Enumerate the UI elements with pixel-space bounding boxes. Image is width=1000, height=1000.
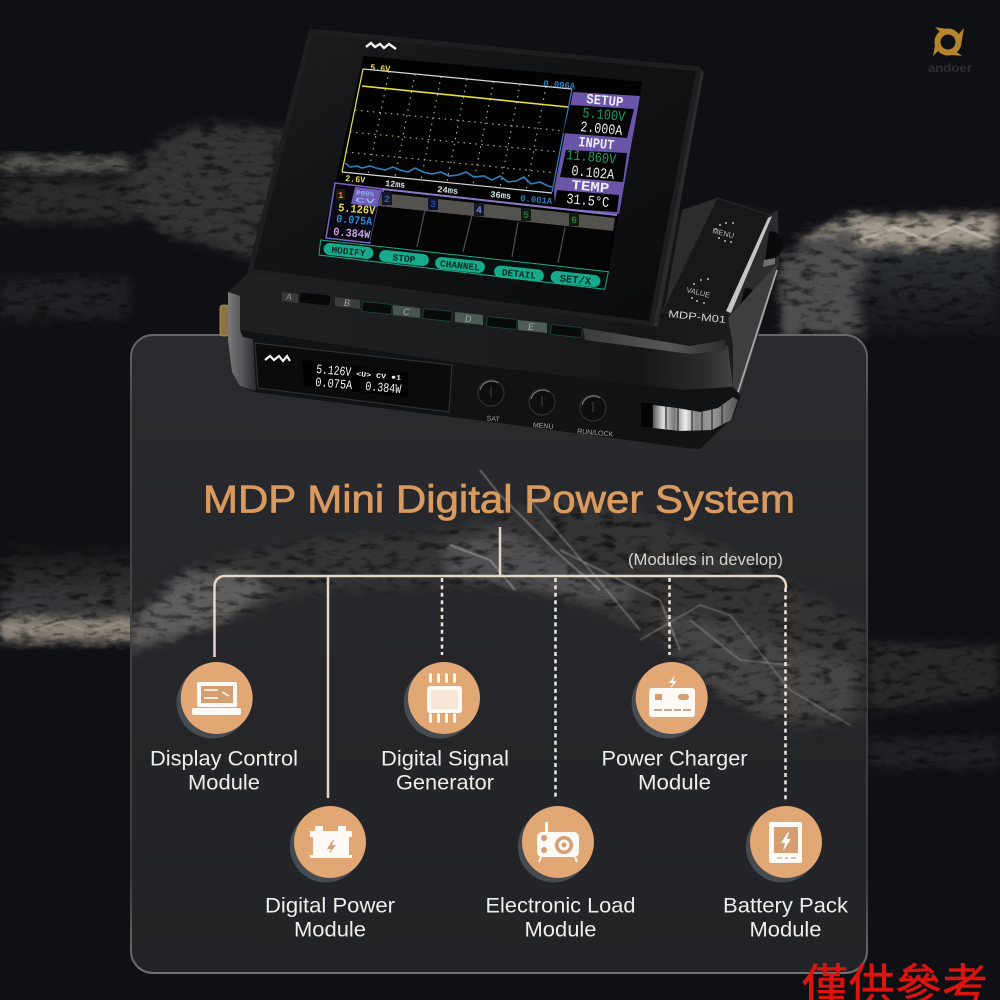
- icon: battery: [310, 826, 352, 858]
- tablet display: [250, 31, 704, 326]
- channel grid 2 to 6: 6: [571, 216, 577, 227]
- icon: chip: [427, 678, 462, 718]
- brand logo: andoer: andoer: [928, 61, 972, 75]
- rock band: lower left: [0, 550, 150, 642]
- rock band: lower right: [868, 642, 1000, 768]
- label: [486, 894, 636, 942]
- button: SAT: SAT: [486, 415, 501, 424]
- readout panel: setup, input, temp: 11.860V: [566, 148, 617, 169]
- button: SAT: [478, 380, 504, 424]
- oscilloscope plot: 36ms: [490, 190, 512, 202]
- right dial block: [662, 198, 782, 332]
- channel 1 block: [326, 183, 384, 243]
- button row A to E: E: [528, 322, 535, 332]
- label: [265, 894, 395, 942]
- channel 1 block: CV: [355, 197, 377, 207]
- oscilloscope plot: 24ms: [437, 185, 459, 197]
- label: Electronic Load: [486, 894, 636, 918]
- module: Display Control: [150, 662, 298, 794]
- panel rock texture: [131, 470, 868, 732]
- channel grid 2 to 6: 4: [476, 206, 482, 217]
- button row A to E: D: [465, 314, 472, 324]
- label: Display Control: [150, 748, 298, 770]
- oscilloscope plot: 5.6V: [370, 63, 391, 75]
- softkey bar: [319, 240, 608, 290]
- readout panel: setup, input, temp: INPUT: [578, 135, 615, 154]
- OLED readout: [302, 360, 408, 398]
- icon: andoer mark: [933, 27, 964, 56]
- softkey: SET/X: [550, 270, 601, 290]
- oscilloscope plot: [342, 63, 576, 207]
- device: MDP-M01 power supply: [220, 31, 782, 449]
- label: Module: [188, 772, 260, 794]
- label: [381, 748, 509, 794]
- button row A to E: C: [403, 307, 410, 317]
- OLED readout: 5.126V: [316, 362, 352, 380]
- label: Module: [524, 918, 596, 942]
- rock band: upper left: [0, 122, 330, 320]
- icon: laptop: [192, 682, 241, 715]
- button row A to E: B: [344, 298, 350, 308]
- oscilloscope plot: 12ms: [385, 179, 406, 191]
- oscilloscope plot: 2.6V: [345, 174, 366, 186]
- OLED readout: 0.075A: [315, 375, 353, 393]
- rock band: upper right: [780, 214, 1000, 338]
- channel 1 block: P00%: [356, 190, 375, 200]
- label: [723, 894, 849, 942]
- front logo: [265, 356, 290, 361]
- tablet bezel: [250, 31, 699, 324]
- softkey: DETAIL: [493, 265, 544, 283]
- readout panel: setup, input, temp: 31.5°C: [566, 192, 610, 212]
- note: modules in develop: (Modules in develop): [628, 551, 783, 569]
- label: Battery Pack: [723, 894, 849, 918]
- label: Module: [638, 772, 711, 794]
- top logo: [366, 43, 396, 49]
- lower front panel: [240, 330, 740, 449]
- rotary encoder knob: [641, 397, 738, 431]
- softkey: STOP: STOP: [392, 252, 416, 266]
- icon: battery tablet: [769, 822, 802, 863]
- model name: MDP-M01: [668, 309, 727, 326]
- button: RUN/LOCK: RUN/LOCK: [577, 428, 614, 439]
- channel grid 2 to 6: 3: [430, 200, 436, 211]
- module: Battery Pack: [723, 806, 849, 942]
- label: Module: [750, 918, 822, 942]
- softkey: CHANNEL: [434, 256, 485, 274]
- OLED window: [255, 343, 452, 412]
- dial label: value: VALUE: [686, 285, 711, 300]
- label: [150, 748, 298, 794]
- gold adjuster knob: [220, 305, 229, 336]
- button row A to E: [282, 292, 582, 338]
- button: MENU: [529, 389, 555, 431]
- readout panel: setup, input, temp: [554, 92, 640, 214]
- label: [602, 748, 748, 794]
- oscilloscope plot: 0.096A: [543, 79, 576, 92]
- connector tree: [214, 527, 786, 802]
- readout panel: setup, input, temp: SETUP: [586, 92, 624, 112]
- label: Digital Power: [265, 894, 395, 918]
- screen: [319, 56, 642, 290]
- title: MDP Mini Digital Power System: [203, 478, 795, 522]
- OLED readout: <U> CV ●1: [356, 371, 401, 383]
- OLED readout: 0.384W: [365, 379, 402, 397]
- icon: charger: [649, 675, 695, 717]
- channel 1 block: 5.126V: [338, 202, 376, 218]
- module: Digital Power: [265, 806, 395, 942]
- readout panel: setup, input, temp: 0.102A: [571, 164, 615, 184]
- label: Module: [294, 918, 366, 942]
- channel 1 block: 1: [338, 191, 344, 201]
- channel grid 2 to 6: 2: [384, 195, 390, 206]
- label: Power Charger: [602, 748, 748, 770]
- panel: MDP system: [131, 335, 868, 973]
- dial label: menu: MENU: [712, 226, 735, 240]
- oscilloscope plot: 0.001A: [520, 194, 553, 207]
- module: Power Charger: [602, 662, 748, 794]
- label: Digital Signal: [381, 748, 509, 770]
- softkey: MODIFY: [323, 242, 374, 260]
- softkey: MODIFY: MODIFY: [331, 245, 366, 259]
- channel 1 block: 0.384W: [333, 226, 371, 242]
- tablet side edge: [650, 66, 704, 326]
- brand logo: andoer: [928, 27, 972, 75]
- channel 1 block: 0.075A: [336, 213, 373, 229]
- softkey: CHANNEL: CHANNEL: [439, 258, 481, 274]
- background: rock bands: [0, 122, 1000, 768]
- button: MENU: MENU: [533, 422, 554, 431]
- button: RUN/LOCK: [577, 395, 614, 439]
- readout panel: setup, input, temp: 2.000A: [580, 120, 623, 140]
- softkey: STOP: [378, 249, 429, 267]
- plate highlight wedge: [583, 328, 727, 354]
- channel grid 2 to 6: 5: [523, 211, 529, 222]
- channel grid 2 to 6: [370, 189, 617, 268]
- button row A to E: A: [285, 292, 292, 302]
- device base body: [226, 198, 779, 449]
- readout panel: setup, input, temp: 5.100V: [582, 106, 626, 126]
- readout panel: setup, input, temp: TEMP: [571, 178, 610, 198]
- module: Digital Signal Generator: [381, 662, 509, 794]
- icon: load: [537, 822, 579, 862]
- front right gloss: [640, 346, 733, 390]
- lit side face: [728, 264, 777, 395]
- upper body and top plate: [228, 270, 733, 390]
- softkey: DETAIL: DETAIL: [501, 267, 537, 282]
- left chrome column: [228, 292, 256, 391]
- label: Generator: [396, 772, 494, 794]
- module: Electronic Load: [486, 806, 636, 942]
- softkey: SET/X: SET/X: [559, 273, 592, 289]
